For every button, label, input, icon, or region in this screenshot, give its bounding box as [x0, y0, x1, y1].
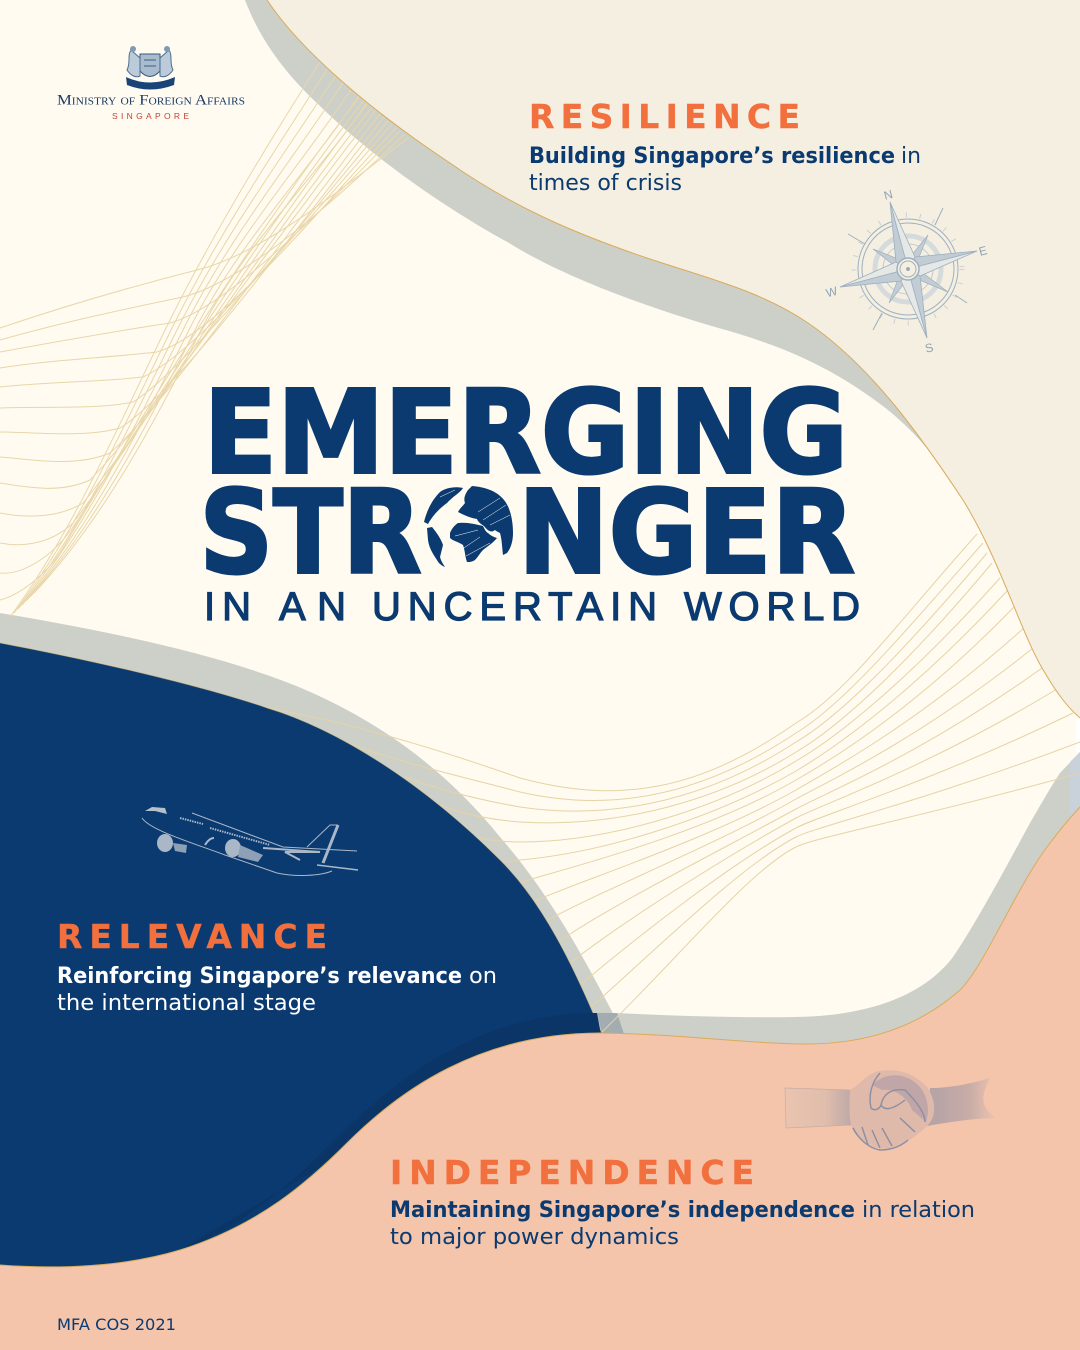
- text: relevance line 1 regular: on: [469, 963, 497, 989]
- heading: independence: INDEPENDENCE: [390, 1153, 754, 1192]
- gold edge on independence panel: [0, 807, 1080, 1267]
- ministry country: SINGAPORE: [112, 111, 189, 121]
- white sliver at right edge: [1076, 716, 1080, 752]
- icon: compass: S: [924, 340, 935, 356]
- heading: resilience: RESILIENCE: [529, 97, 800, 136]
- grey band: top right: [245, 0, 1080, 600]
- icon: compass: [824, 187, 989, 356]
- subtitle: WORLD: [684, 585, 860, 629]
- title line 2: start: STR: [200, 466, 422, 600]
- panel: relevance background: [0, 643, 602, 1300]
- title line 2: letter O behind globe: O: [424, 467, 514, 599]
- subtitle: [204, 585, 860, 629]
- grey band: left: [0, 613, 624, 1100]
- icon: compass: W: [824, 284, 840, 300]
- icon: handshake: [785, 1070, 997, 1150]
- text: independence line 1 regular: in relation: [862, 1197, 975, 1223]
- band tint at right edge: [1070, 752, 1080, 818]
- text: relevance line 1 bold: Reinforcing Singapore’s relevance: [57, 963, 462, 989]
- icon: compass: N: [882, 187, 894, 203]
- subtitle: AN: [279, 585, 346, 629]
- footer note: MFA COS 2021: [57, 1315, 176, 1334]
- ministry name: Ministry of Foreign Affairs: [57, 92, 245, 108]
- block: independence text: [390, 1153, 975, 1250]
- block: relevance text: [57, 917, 497, 1016]
- heading: relevance: RELEVANCE: [57, 917, 327, 956]
- title line 1: EMERGING: [204, 366, 848, 500]
- icon: airplane: [142, 807, 358, 875]
- text: independence line 2: to major power dynamics: [390, 1224, 679, 1250]
- icon: compass: E: [977, 243, 989, 259]
- logo: Ministry of Foreign Affairs: [57, 46, 245, 121]
- grey band: bottom right: [600, 752, 1080, 1100]
- fine lines: upper left fan: [0, 62, 408, 617]
- text: resilience line 2: times of crisis: [529, 170, 682, 196]
- title: [200, 366, 860, 629]
- text: relevance line 2: the international stage: [57, 990, 316, 1016]
- panel: resilience background: [267, 0, 1080, 718]
- blue panel shadow: [180, 1013, 602, 1250]
- gold edge on relevance panel: [0, 643, 602, 1034]
- band overlap: [597, 1013, 624, 1034]
- subtitle: IN: [204, 585, 251, 629]
- title line 2: end: NGER: [518, 466, 855, 600]
- panel: independence background: [0, 807, 1080, 1350]
- text: resilience line 1 bold: Building Singapore’s resilience: [529, 143, 895, 169]
- gold edge on resilience panel: [267, 0, 1080, 718]
- text: independence line 1 bold: Maintaining Singapore’s independence: [390, 1197, 855, 1223]
- icon: crest: [126, 46, 175, 90]
- subtitle: UNCERTAIN: [372, 585, 657, 629]
- block: resilience text: [529, 97, 921, 196]
- icon: globe as the letter O: [424, 486, 513, 567]
- text: resilience line 1 regular: in: [901, 143, 921, 169]
- fine lines: lower right fan: [267, 534, 1080, 1032]
